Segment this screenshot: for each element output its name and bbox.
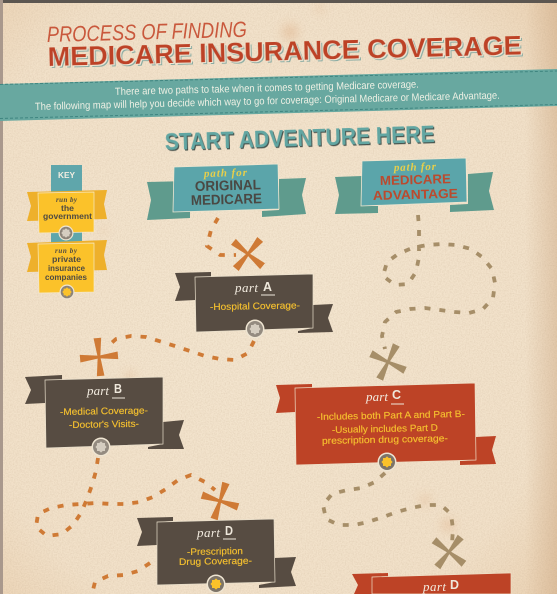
private card <box>38 243 94 293</box>
banner: path for medicare advantage <box>335 158 494 214</box>
heading: A <box>263 279 273 294</box>
government text: the <box>61 204 75 213</box>
marker <box>246 320 264 338</box>
heading: C <box>392 387 402 402</box>
dashed route: part A to part B <box>78 336 254 378</box>
x mark <box>221 227 275 281</box>
key label: KEY <box>58 171 76 180</box>
x mark <box>422 525 476 579</box>
x mark <box>363 337 413 387</box>
heading <box>422 577 459 594</box>
medicare heading: MEDICARE <box>380 171 451 188</box>
ribbons <box>276 384 312 413</box>
banner text line 1: There are two paths to take when it comes to getting Medicare coverage. <box>115 79 419 98</box>
plate <box>157 519 275 585</box>
private marker <box>60 284 74 300</box>
description: prescription drug coverage- <box>322 433 448 447</box>
heading: D <box>450 577 459 592</box>
plate <box>295 383 476 465</box>
private text <box>45 247 88 282</box>
private ribbon <box>27 240 107 272</box>
marker <box>378 452 396 472</box>
dashed route: below part D <box>92 563 150 594</box>
description: -Includes both Part A and Part B- <box>317 409 465 423</box>
government ribbon <box>27 190 107 221</box>
ribbons <box>25 375 62 404</box>
heading: B <box>114 381 122 396</box>
panel: part A <box>175 272 333 338</box>
dashed route: advantage to part C <box>363 215 495 387</box>
ribbon right <box>262 178 306 217</box>
advantage heading: ADVANTAGE <box>373 186 458 203</box>
x mark <box>196 477 244 525</box>
key <box>27 165 107 300</box>
description: -Doctor's Visits- <box>69 419 139 431</box>
government text: run by <box>56 196 78 204</box>
private text: companies <box>45 273 88 282</box>
description: -Medical Coverage- <box>60 405 148 418</box>
heading: part <box>422 579 446 594</box>
description <box>60 405 148 431</box>
plate <box>195 274 313 332</box>
description: -Usually includes Part D <box>332 423 438 436</box>
path for label: path for <box>203 167 248 180</box>
heading <box>196 523 236 540</box>
heading <box>234 279 275 296</box>
government marker <box>58 226 74 240</box>
description: -Prescription <box>187 546 243 558</box>
banner: path for original medicare <box>147 164 306 220</box>
panel: part B <box>25 375 184 456</box>
marker <box>92 438 110 456</box>
private text: private <box>52 255 82 264</box>
government card <box>38 192 94 233</box>
ribbon <box>352 573 388 594</box>
plate <box>361 158 467 206</box>
intro banner <box>0 69 557 121</box>
description <box>317 409 465 447</box>
ribbons <box>175 272 211 301</box>
heading: part <box>86 383 109 398</box>
medicare heading: MEDICARE <box>191 190 262 208</box>
ribbon left <box>147 181 190 220</box>
title line 2: MEDICARE INSURANCE COVERAGE <box>47 30 522 72</box>
description: Drug Coverage- <box>179 556 252 568</box>
ribbons <box>137 517 173 546</box>
heading <box>365 387 404 404</box>
plate <box>45 377 163 448</box>
heading: part <box>365 389 388 404</box>
panel: part D <box>137 517 296 594</box>
ribbon right <box>450 172 494 212</box>
start heading: START ADVENTURE HERE <box>164 121 435 156</box>
x mark <box>78 336 120 378</box>
original heading: ORIGINAL <box>195 176 261 194</box>
private text: run by <box>55 247 78 255</box>
ribbon left <box>335 176 378 214</box>
path for label: path for <box>393 161 437 174</box>
heading: D <box>225 523 233 538</box>
panel: part D (advantage path) <box>352 573 511 594</box>
heading: part <box>234 280 258 295</box>
key tab <box>51 165 82 247</box>
title line 1: PROCESS OF FINDING <box>46 17 247 47</box>
heading: part <box>196 525 220 540</box>
dashed route: part B to part D <box>36 458 244 536</box>
marker <box>206 574 226 594</box>
plate <box>173 164 279 212</box>
government text <box>43 196 92 221</box>
heading <box>86 381 125 398</box>
dashed route: original to part A <box>207 218 275 281</box>
plate <box>372 573 511 594</box>
government text: government <box>43 212 92 221</box>
description <box>179 546 252 568</box>
description: -Hospital Coverage- <box>210 300 300 313</box>
banner text line 2: The following map will help you decide which way to go for coverage: Original Medicare or Medicare Advantage. <box>35 90 500 113</box>
title <box>46 17 522 72</box>
dashed route: part C to next part D <box>323 473 476 579</box>
private text: insurance <box>48 264 86 273</box>
panel: part C <box>276 383 496 472</box>
